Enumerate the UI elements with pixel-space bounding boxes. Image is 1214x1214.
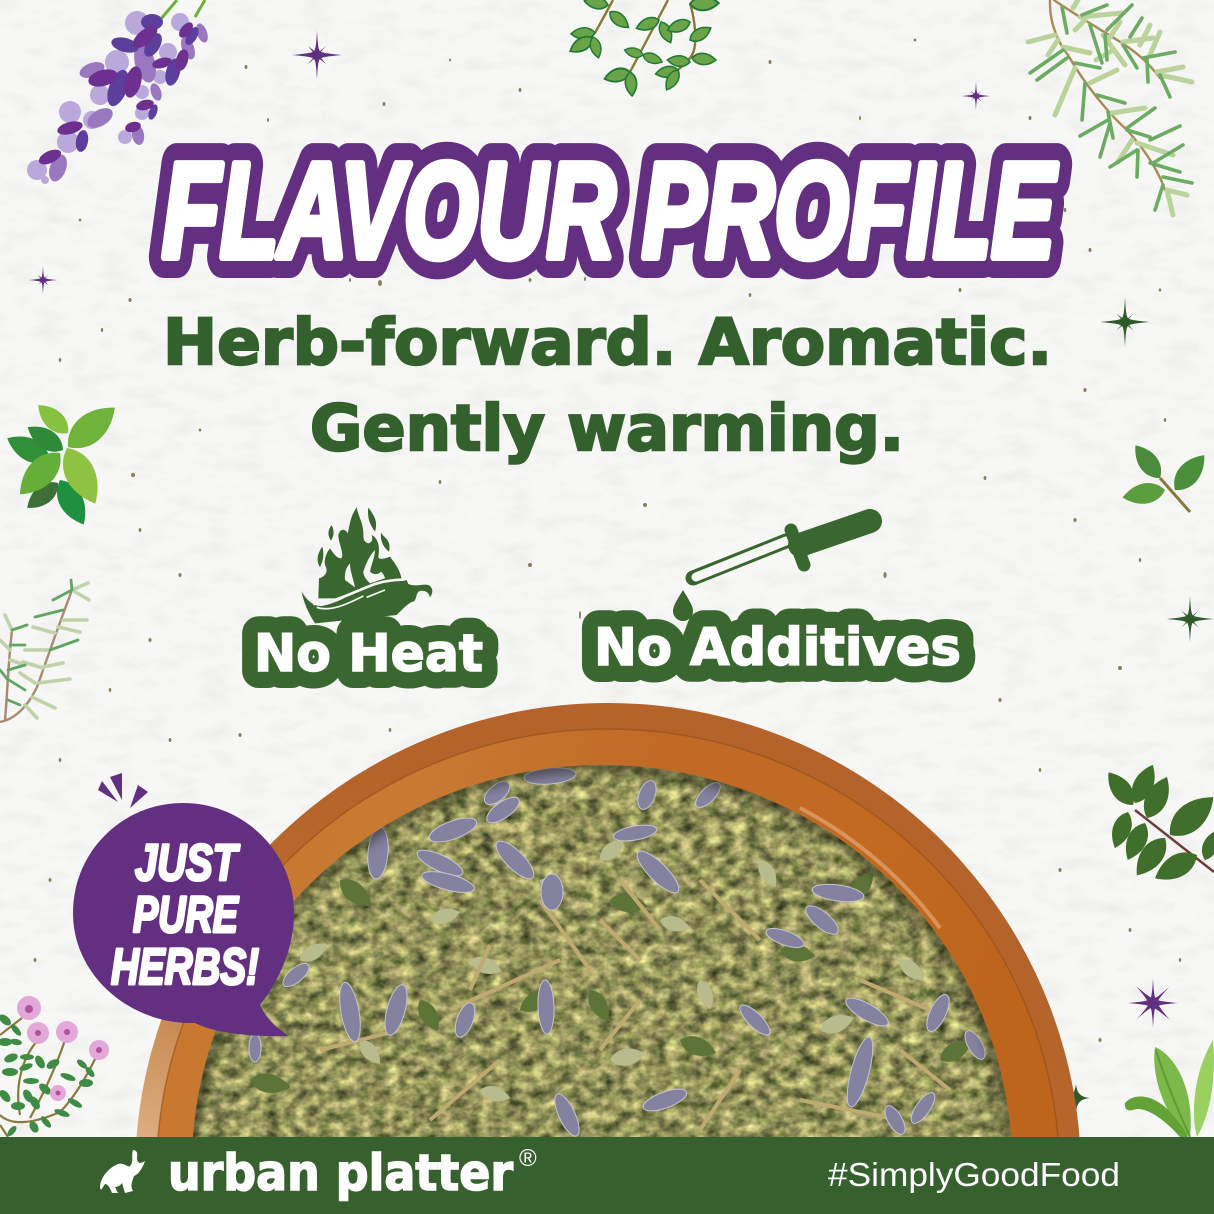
wooden bowl with herbs: [136, 703, 1080, 1139]
icon: flame and chilli: [302, 507, 432, 623]
illustration: rosemary sprig top right: [1028, 0, 1192, 215]
illustration: flowering thyme bottom left: [0, 996, 109, 1138]
badge: no additives: No Additives: [594, 618, 961, 678]
illustration: oregano leaves right: [1121, 440, 1213, 512]
illustration: large leaves bottom right: [1125, 1040, 1214, 1137]
subtitle: [163, 306, 1052, 465]
speech bubble: just pure herbs: [73, 773, 294, 1036]
icon: dropper with drop: [673, 521, 870, 621]
badge: no additives: No Additives: [594, 618, 961, 678]
brand name: urban platter: [168, 1144, 513, 1202]
speech bubble: just pure herbs: JUST: [135, 834, 240, 891]
illustration: basil leaves: [2, 397, 124, 530]
registered mark: ®: [519, 1145, 537, 1172]
illustration: thyme sprigs top: [567, 0, 719, 96]
subtitle: Herb-forward. Aromatic.: [163, 306, 1052, 379]
illustration: rosemary sprig left: [0, 580, 89, 722]
subtitle: Gently warming.: [310, 392, 904, 465]
badge: no heat: No Heat: [254, 624, 483, 684]
dried herb mix: [190, 760, 1020, 1139]
badge: no heat: No Heat: [254, 624, 483, 684]
illustration: dark leaf branch right: [1101, 761, 1214, 888]
speech bubble: just pure herbs: HERBS!: [111, 938, 259, 995]
footer bar: [0, 1137, 1214, 1214]
hashtag: #SimplyGoodFood: [828, 1156, 1120, 1193]
speech bubble: just pure herbs: PURE: [133, 886, 239, 943]
bowl rim: [136, 703, 1080, 1137]
illustration: lavender sprigs: [27, 0, 210, 184]
icon: elephant logo: [100, 1150, 145, 1193]
